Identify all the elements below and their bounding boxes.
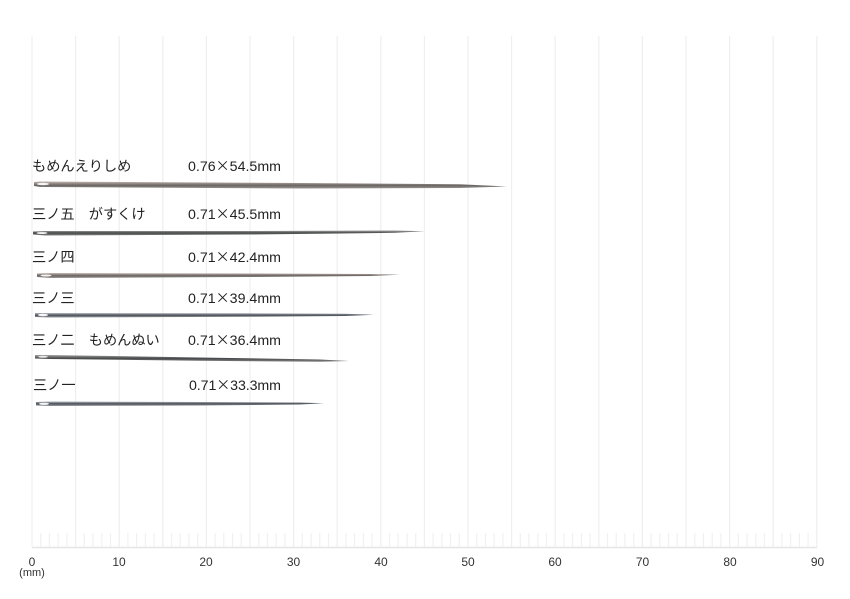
needle row: san-no-shi: 三ノ四 [32, 250, 75, 266]
axis labels: (mm) [19, 567, 45, 579]
axis labels: 80 [723, 555, 737, 569]
needle row: san-no-san: 三ノ三 [32, 291, 75, 307]
axis labels: 40 [374, 555, 388, 569]
needle row: san-no-ichi: 三ノ一 [33, 378, 76, 394]
needle row: san-no-go gasukuke [32, 204, 425, 236]
axis labels: 60 [548, 555, 562, 569]
needle row: san-no-san [32, 288, 374, 318]
needle row: momen-erishime [32, 156, 507, 188]
axis labels: 70 [636, 555, 649, 569]
needle row: momen-erishime: 0.76×54.5mm [188, 156, 281, 176]
axis labels: 90 [811, 555, 824, 569]
needle row: san-no-shi: 0.71×42.4mm [188, 247, 281, 267]
axis labels: 20 [199, 555, 213, 569]
needle row: san-no-shi [32, 247, 400, 278]
needle row: momen-erishime: もめんえりしめ [32, 159, 131, 175]
chart: ruler grid [32, 36, 817, 548]
axis labels: 0 [29, 555, 36, 569]
axis labels: 10 [112, 555, 126, 569]
needle row: san-no-ni momen-nui [32, 330, 349, 362]
needle row: san-no-go gasukuke: 三ノ五 がすくけ [32, 207, 146, 223]
needle row: san-no-san: 0.71×39.4mm [188, 288, 281, 308]
needle row: san-no-ni momen-nui: 0.71×36.4mm [188, 330, 281, 350]
axis labels [19, 555, 824, 579]
axis labels: 30 [287, 555, 300, 569]
needle row: san-no-ichi [33, 375, 324, 406]
needle row: san-no-ni momen-nui: 三ノ二 もめんぬい [32, 333, 160, 349]
needle row: san-no-ichi: 0.71×33.3mm [189, 375, 281, 395]
needle row: san-no-go gasukuke: 0.71×45.5mm [188, 204, 281, 224]
axis labels: 50 [461, 555, 475, 569]
